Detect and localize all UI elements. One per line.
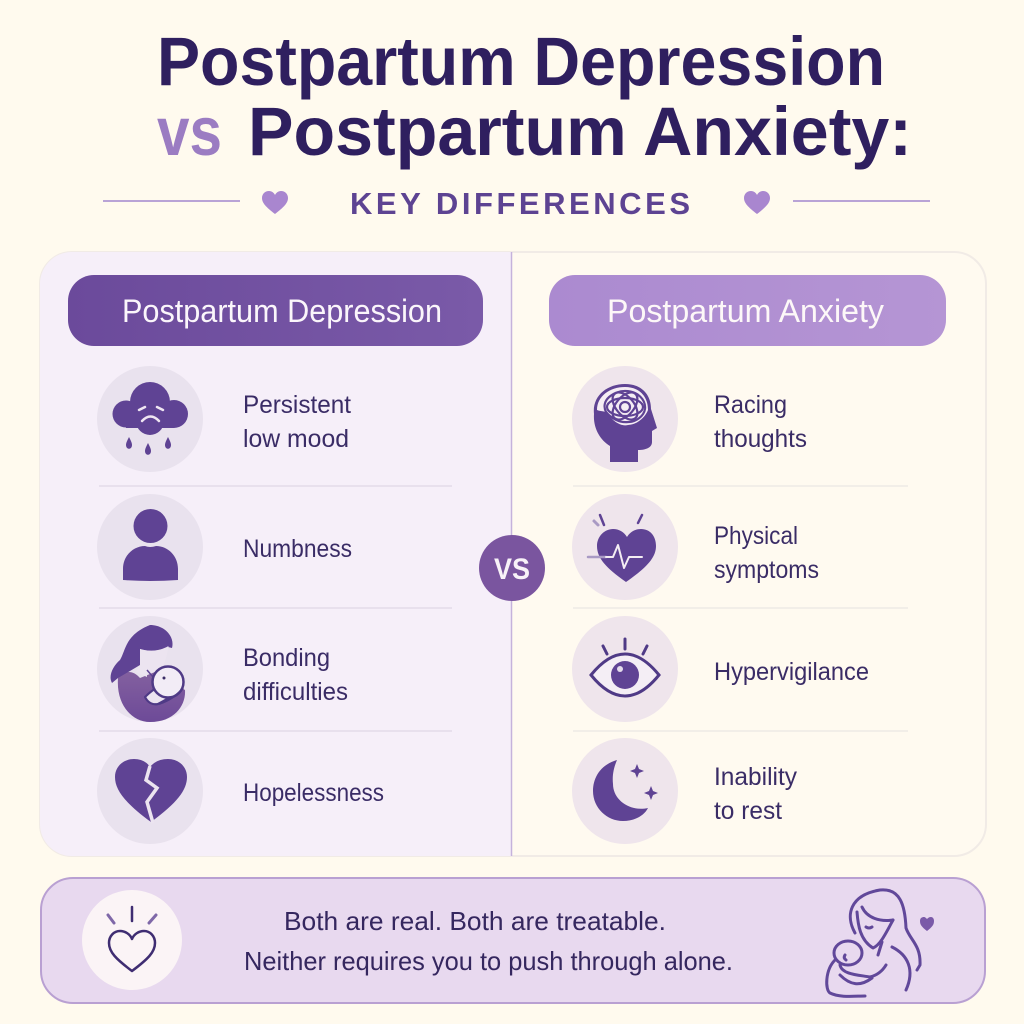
text: persistent low mood xyxy=(243,391,351,453)
vs badge xyxy=(479,535,545,601)
text: racing thoughts: Racing xyxy=(714,391,787,419)
message text: Both are real. Both are treatable. xyxy=(284,906,666,936)
header: postpartum depression: Postpartum Depression xyxy=(122,293,442,329)
message text: Neither requires you to push through alone. xyxy=(244,946,733,976)
text: bonding difficulties: Bonding xyxy=(243,644,330,672)
text: hopelessness: Hopelessness xyxy=(243,779,384,807)
icon: heart with pulse xyxy=(572,494,678,600)
text: inability to rest: to rest xyxy=(714,797,782,825)
icon: small heart xyxy=(920,917,934,931)
text: persistent low mood: Persistent xyxy=(243,391,351,419)
text: physical symptoms xyxy=(714,522,819,584)
text: hypervigilance: Hypervigilance xyxy=(714,658,869,686)
header: postpartum anxiety xyxy=(549,275,946,346)
icon: person xyxy=(97,494,203,600)
header: postpartum anxiety: Postpartum Anxiety xyxy=(607,293,884,329)
text: inability to rest xyxy=(714,763,797,825)
icon: broken heart xyxy=(97,738,203,844)
text: inability to rest: Inability xyxy=(714,763,797,791)
icon: watchful eye xyxy=(572,616,678,722)
comparison panel xyxy=(40,252,986,856)
title: vs xyxy=(157,93,222,170)
message text xyxy=(244,906,733,976)
header: postpartum depression xyxy=(68,275,483,346)
text: physical symptoms: symptoms xyxy=(714,556,819,584)
text: physical symptoms: Physical xyxy=(714,522,798,550)
banner: reassurance message xyxy=(41,878,985,1003)
icon: glowing heart xyxy=(82,890,182,990)
text: racing thoughts xyxy=(714,391,807,453)
text: persistent low mood: low mood xyxy=(243,425,349,453)
icon: mother and baby outline xyxy=(827,890,920,996)
text: bonding difficulties: difficulties xyxy=(243,678,348,706)
title xyxy=(157,23,912,170)
icon: mother holding baby xyxy=(97,616,203,722)
icon: sad rain cloud xyxy=(97,366,203,472)
vs badge: VS xyxy=(494,553,530,586)
title: Postpartum Anxiety: xyxy=(248,93,912,170)
icon: head with tangled thoughts xyxy=(572,366,678,472)
icon: moon and stars xyxy=(572,738,678,844)
text: racing thoughts: thoughts xyxy=(714,425,807,453)
subtitle: key differences xyxy=(103,186,930,221)
title: Postpartum Depression xyxy=(157,23,885,100)
subtitle: key differences: KEY DIFFERENCES xyxy=(350,186,690,221)
text: bonding difficulties xyxy=(243,644,348,706)
text: numbness: Numbness xyxy=(243,535,352,563)
